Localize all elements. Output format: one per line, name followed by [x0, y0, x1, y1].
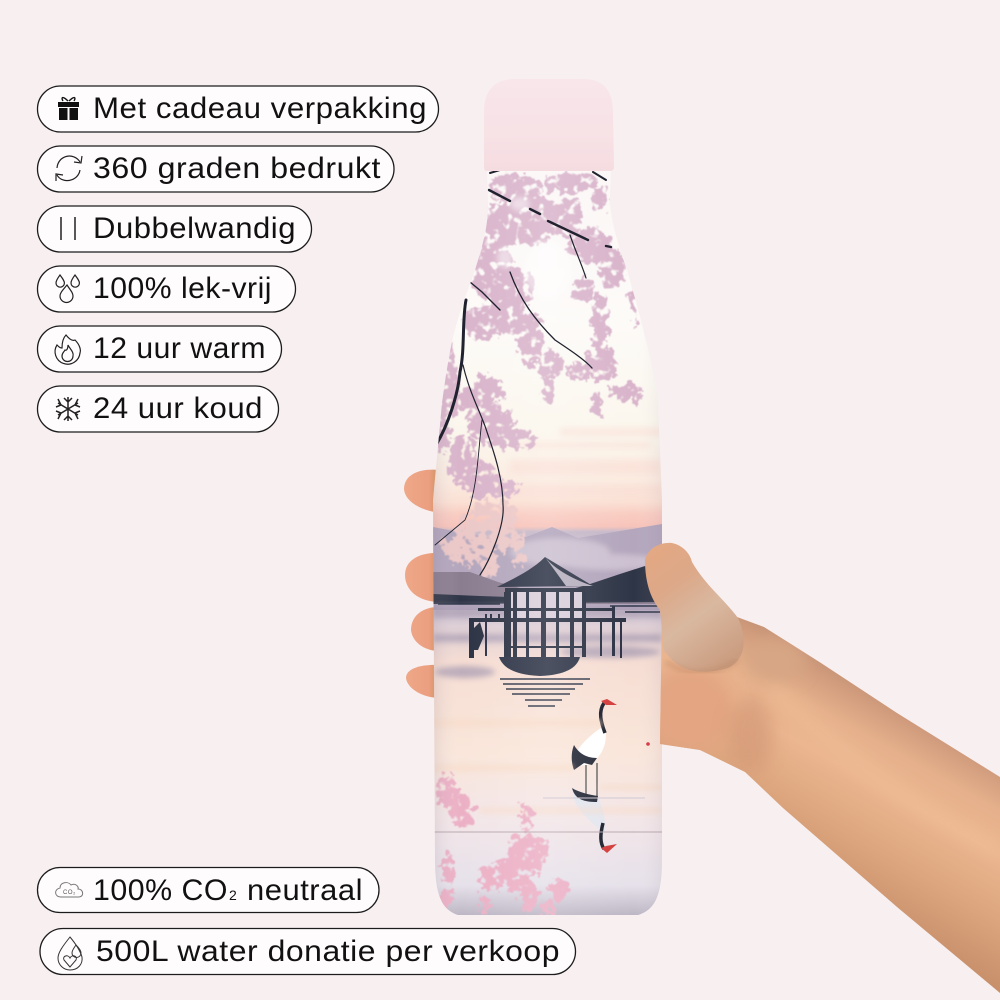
pill: 12 hours warm [38, 326, 282, 372]
pagoda [438, 557, 660, 706]
pill: gift wrapping [38, 86, 438, 132]
red dot [646, 742, 650, 746]
pill: gift wrapping: Met cadeau verpakking [93, 92, 427, 125]
icon: flame [55, 335, 80, 364]
tree branches [435, 170, 611, 575]
water line near crane [543, 798, 645, 799]
feature pills: top list [38, 86, 438, 432]
bottle [433, 79, 662, 915]
bottle body artwork [433, 171, 662, 915]
roof [497, 557, 593, 587]
pill: CO2 neutral [38, 868, 379, 912]
pill: water donation [40, 928, 576, 974]
pill: double wall [38, 206, 312, 252]
arm light streak [770, 690, 1000, 850]
blossom canopy [435, 174, 643, 500]
far shore hills [433, 572, 662, 604]
pill: 12 hours warm: 12 uur warm [93, 332, 266, 365]
icon: snowflake [56, 397, 80, 421]
pill: double wall: Dubbelwandig [93, 212, 296, 245]
distant mountains [433, 524, 662, 610]
water peach streaks [433, 720, 662, 813]
crane [572, 699, 617, 853]
sky clouds [514, 428, 659, 472]
lower blossom over mountains [442, 501, 525, 577]
cylinder shading [433, 175, 662, 915]
icon: gift [58, 98, 79, 120]
icon: water drops with heart [58, 937, 82, 970]
icon: rotate arrows [56, 156, 82, 181]
feature pills: bottom list [38, 868, 576, 974]
window panels [510, 592, 584, 618]
crane neck [601, 703, 605, 733]
island reflection [499, 657, 580, 676]
bottle cap [484, 79, 614, 171]
bottom blossom [437, 772, 570, 918]
pill: CO2 neutral: neutraal [247, 874, 363, 907]
crane head [601, 699, 617, 705]
thumb [645, 543, 744, 672]
crane reflection [573, 787, 605, 835]
hand and arm with thumb [645, 543, 1000, 993]
mountain mist [510, 538, 660, 570]
lower seam [434, 832, 662, 833]
pill: leak free [38, 266, 296, 312]
pill: water donation: 500L water donatie per verkoop [96, 935, 560, 968]
pill: 24 hours cold: 24 uur koud [93, 392, 263, 425]
pill: 24 hours cold [38, 386, 278, 432]
pill: 360 printed: 360 graden bedrukt [93, 152, 381, 185]
icon: CO2 cloud [56, 883, 83, 897]
arm [660, 580, 1000, 993]
crane legs [586, 763, 597, 796]
crane body [578, 725, 606, 766]
icon: double wall lines [61, 217, 75, 240]
sky highlight patches in canopy [497, 197, 572, 300]
fingers behind bottle [404, 470, 442, 698]
frame [504, 588, 586, 657]
water bands [433, 606, 662, 678]
dark treeline [433, 566, 662, 604]
icon: CO2 cloud: CO₂ [63, 890, 76, 896]
water ripples [438, 604, 660, 706]
pill: CO2 neutral: 100% CO [93, 874, 228, 907]
pill: CO2 neutral: 2 [229, 887, 237, 903]
thumb crease [665, 660, 738, 672]
pill: 360 printed [38, 146, 394, 192]
pill: leak free: 100% lek-vrij [93, 272, 272, 305]
deck [469, 606, 626, 658]
icon: water drops [56, 275, 79, 302]
palm and wrist tones [645, 638, 805, 773]
